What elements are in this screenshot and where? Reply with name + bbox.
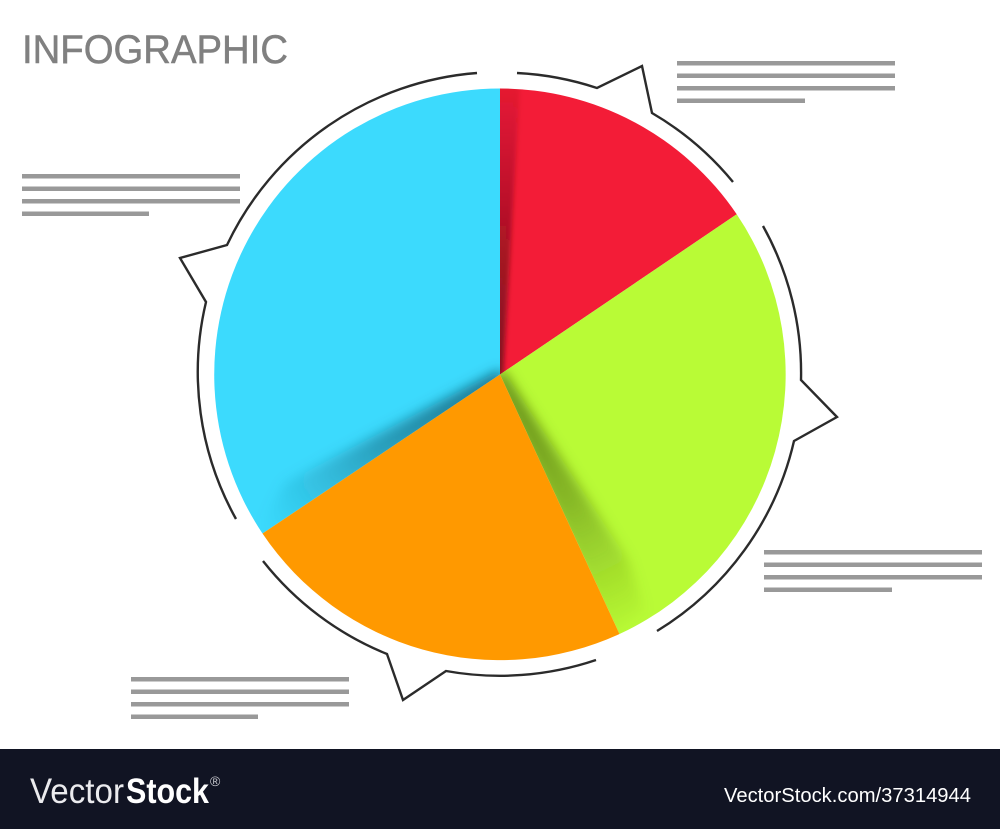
callout outline: blue slice xyxy=(180,73,477,519)
footer logo xyxy=(30,772,221,811)
outline callouts xyxy=(180,66,837,700)
text placeholder: right xyxy=(764,550,982,592)
slice: green xyxy=(494,214,786,636)
footer logo: Vector xyxy=(30,772,124,811)
slice: red xyxy=(494,86,737,376)
pie chart xyxy=(214,86,786,660)
text placeholder: left xyxy=(22,174,240,216)
callout outline: green slice xyxy=(657,226,837,631)
footer logo: ® xyxy=(210,773,221,789)
title: INFOGRAPHIC xyxy=(22,28,288,72)
text placeholder: top right xyxy=(677,61,895,103)
slice: orange xyxy=(262,374,620,660)
slice: blue xyxy=(214,88,505,540)
callout outline: red slice xyxy=(517,66,733,182)
footer bar xyxy=(0,749,1000,829)
footer id: VectorStock.com/37314944 xyxy=(724,785,971,807)
callout outline: orange slice xyxy=(263,561,596,700)
text placeholder: bottom xyxy=(131,677,349,719)
footer logo: Stock xyxy=(126,772,209,811)
